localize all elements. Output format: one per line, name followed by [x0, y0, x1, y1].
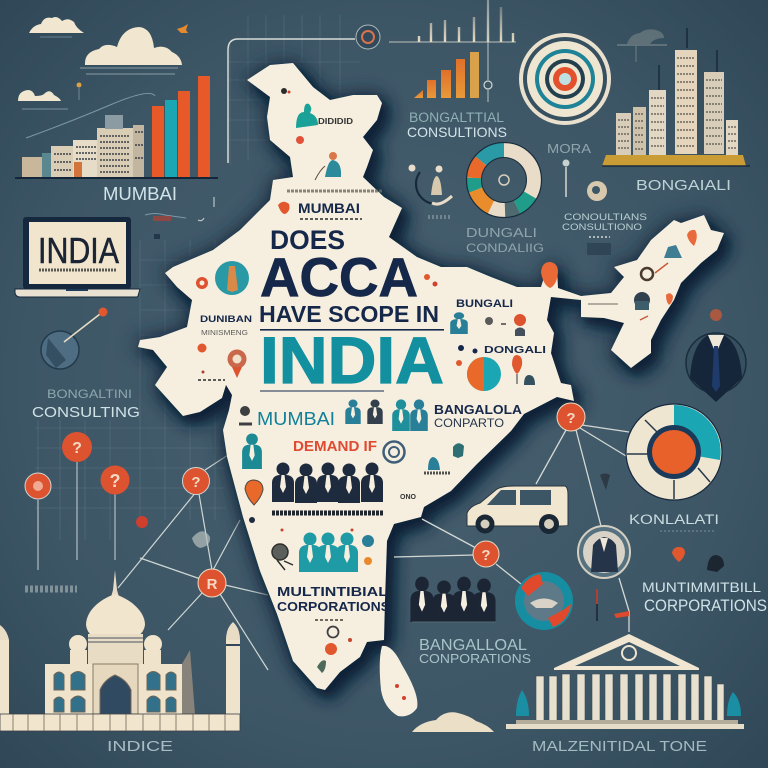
label: Mora: MORA — [547, 141, 591, 156]
pin: red right: ? — [566, 410, 576, 427]
title: INDIA — [260, 323, 444, 397]
map items: west: MINISMENG — [201, 330, 248, 337]
label: Muntimmitbill corporations — [642, 579, 767, 615]
map items: Bengal pins — [512, 355, 535, 385]
chart: round dial — [626, 404, 722, 500]
pin: red 5 — [198, 569, 226, 597]
temple — [506, 634, 744, 729]
chart: orange bars — [414, 52, 479, 98]
Sri Lanka — [380, 646, 417, 716]
map items: Bengal — [424, 274, 546, 366]
icon: small cloud top — [617, 29, 667, 62]
title: ACCA — [260, 246, 418, 308]
label: Bongaltial consultions — [407, 110, 507, 140]
map items: Bangalore — [384, 399, 523, 501]
chart: Mumbai skyline and bars — [15, 76, 218, 178]
map items: Bengal: BUNGALI — [456, 298, 513, 310]
pin: orange in map — [245, 480, 263, 523]
map of India — [138, 63, 724, 690]
faint marks below Mumbai — [145, 197, 214, 239]
pin: red 2 — [25, 473, 51, 499]
pie chart in map — [467, 357, 501, 391]
pin: red lower: ? — [481, 547, 491, 564]
laptop label: INDIA — [38, 230, 119, 271]
label: Bongaltial consultions: CONSULTIONS — [407, 124, 507, 140]
label: Bongalali: BONGAIALI — [636, 178, 731, 194]
map pins and network: left — [38, 455, 268, 670]
icon: figure in ring — [408, 164, 452, 217]
map items: north — [281, 88, 353, 180]
label: Dungali — [466, 225, 544, 255]
icons: small marker pair — [600, 474, 724, 572]
map items: far south — [315, 620, 352, 673]
map items: Bengal: DONGALI — [484, 344, 546, 356]
buildings — [22, 115, 144, 177]
pin: red 5: R — [207, 576, 218, 593]
marker: stick and flag — [597, 589, 629, 621]
map shadow — [146, 72, 732, 699]
pin: Nepal — [541, 262, 558, 288]
icon: small balloon — [76, 82, 82, 100]
icon: Sri Lanka dots — [395, 684, 406, 700]
icon: bottom cloud — [412, 712, 494, 732]
label: Dungali: CONDALIIG — [466, 241, 544, 255]
label: Mumbai: MUMBAI — [103, 184, 177, 204]
icon: teal ring — [515, 572, 573, 630]
map items: Bangalore: BANGALOLA — [434, 402, 523, 417]
label: Bangalloal conporations: BANGALLOAL — [419, 637, 527, 654]
map text: demand: DEMAND IF — [293, 438, 377, 455]
title: DOES — [270, 225, 345, 255]
pin: red 1 — [62, 432, 92, 462]
label: Konlalati — [629, 512, 719, 531]
map items: Bangalore: ONO — [400, 494, 416, 501]
label: conoultans: CONSULTIONO — [562, 222, 642, 232]
map items: northeast — [588, 230, 697, 320]
label: consulting — [32, 387, 140, 421]
chart: donut — [466, 142, 542, 218]
icon: cloud left — [18, 90, 68, 109]
map items: west — [196, 261, 252, 380]
laptop — [15, 217, 140, 297]
icon: cloud large — [80, 27, 182, 74]
pin and network: right — [394, 425, 629, 632]
label: consulting: CONSULTING — [32, 404, 140, 421]
label: Dong consulting graph — [389, 0, 516, 102]
map items: Bangalore: CONPARTO — [434, 416, 504, 430]
icon: suit in circle — [578, 526, 630, 578]
icon: concentric target — [519, 33, 611, 125]
title — [259, 225, 444, 397]
icon: target with pointer — [41, 308, 108, 369]
label: Konlalati: KONLALATI — [629, 512, 719, 527]
pin: red 4: ? — [191, 474, 201, 491]
map items: west: DUNIBAN — [200, 314, 252, 325]
pin: red lower — [473, 541, 499, 567]
pin: red 3: ? — [110, 471, 120, 491]
label: consulting: BONGALTINI — [47, 387, 132, 401]
label: Dungali: DUNGALI — [466, 225, 537, 240]
label: Bangalloal conporations — [419, 637, 531, 666]
map text: multinational corporations: CORPORATIONS — [277, 599, 390, 614]
map text: Mumbai upper — [278, 191, 383, 219]
Taj Mahal — [0, 570, 240, 731]
icon: bird — [177, 24, 188, 33]
icon: cloud small — [29, 17, 84, 37]
label: Indice: INDICE — [107, 738, 173, 755]
pin: red small — [136, 516, 148, 528]
map shadow close — [143, 69, 729, 696]
figures: businesspeople — [410, 577, 496, 622]
map items: Mumbai lower — [239, 391, 384, 469]
title: HAVE SCOPE IN — [259, 301, 439, 327]
figures: professionals row — [272, 462, 383, 503]
icon: small target — [356, 25, 380, 49]
icon: businessman — [686, 309, 746, 402]
icon: small coin — [587, 181, 607, 201]
map text: multinational corporations — [277, 584, 390, 614]
label: conoultans — [562, 212, 647, 255]
map text: Mumbai upper: MUMBAI — [298, 200, 360, 216]
skyline — [602, 28, 750, 166]
decorative connector line — [228, 39, 355, 163]
map items: south — [272, 528, 374, 572]
icon: car — [467, 486, 568, 534]
grid lines — [35, 15, 360, 540]
map halo — [138, 63, 724, 690]
label: conoultans: CONOULTIANS — [564, 212, 647, 223]
map text: multinational corporations: MULTINTIBIAL — [277, 584, 388, 599]
pin: red 3 — [100, 466, 130, 494]
map items: north: DIDIDID — [318, 117, 353, 126]
label: Muntimmitbill corporations: MUNTIMMITBILL — [642, 579, 761, 595]
pin: red right — [557, 403, 585, 431]
label: Bangalloal conporations: CONPORATIONS — [419, 651, 531, 666]
icon: pin stick — [562, 160, 570, 197]
faint skyline mark — [25, 586, 77, 592]
pin: red 1: ? — [72, 440, 82, 457]
pin: red 4 — [182, 468, 210, 494]
icon: small dial — [192, 531, 210, 548]
label: Malzenitidal tone: MALZENITIDAL TONE — [532, 739, 707, 755]
map text: garbled strip — [272, 510, 384, 516]
label: Bongaltial consultions: BONGALTTIAL — [409, 110, 504, 125]
map items: Mumbai lower: MUMBAI — [257, 409, 335, 429]
